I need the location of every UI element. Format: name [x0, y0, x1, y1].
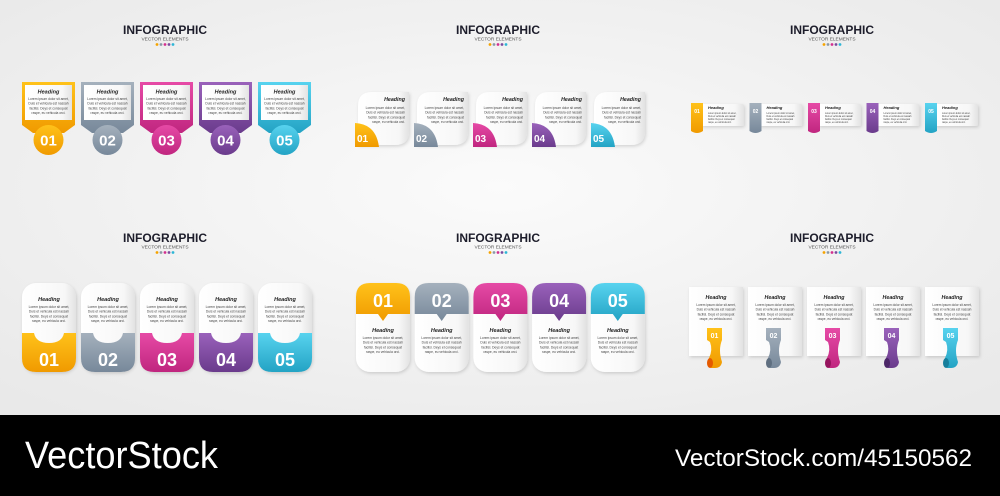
panel: small tab cards (top-right): Heading: [825, 105, 841, 110]
panel: capsule cards with top numbers (bottom-middle): Heading: [548, 328, 571, 334]
panel: small tab cards (top-right): facilisi. Deys et consequat: [884, 118, 910, 121]
panel: small tab cards (top-right): raspe, eu vehicula orci.: [825, 121, 849, 124]
panel: capsule cards with bottom numbers (bottom-left): raspe, eu vehicula orci.: [32, 319, 66, 323]
panel: paper cards with ribbons (bottom-right): Lorem ipsum dolor sit amet,: [696, 303, 736, 307]
title: top-right: VECTOR ELEMENTS: [808, 36, 856, 42]
panel: capsule cards with top numbers (bottom-middle): facilisi. Deys et consequat: [540, 345, 578, 349]
panel: small tab cards (top-right): raspe, eu vehicula orci.: [942, 121, 966, 124]
panel: capsule cards with bottom numbers (bottom-left): facilisi. Deys et consequat: [30, 314, 68, 318]
panel: capsule cards with bottom numbers (bottom-left): raspe, eu vehicula orci.: [150, 319, 184, 323]
panel: capsule cards with top numbers (bottom-middle): facilisi. Deys et consequat: [364, 345, 402, 349]
panel: capsule cards with bottom numbers (bottom-left): 05: [275, 350, 295, 370]
panel: capsule cards with bottom numbers (bottom-left): raspe, eu vehicula orci.: [209, 319, 243, 323]
footer logo text: VectorStock: [25, 435, 219, 477]
panel: small tab cards (top-right): Lorem ipsum dolor sit amet,: [825, 112, 854, 115]
panel: capsule cards with bottom numbers (bottom-left): raspe, eu vehicula orci.: [91, 319, 125, 323]
panel: capsule cards with bottom numbers (bottom-left): Duis et vehicula est nassah: [147, 310, 187, 314]
title: bottom-right: [790, 231, 874, 254]
panel: small tab cards (top-right): Heading: [942, 105, 958, 110]
panel: small tab cards (top-right): 04: [870, 109, 875, 115]
panel: capsule cards with top numbers (bottom-middle): Lorem ipsum dolor sit amet,: [597, 336, 638, 340]
panel: capsule cards with top numbers (bottom-middle): 04: [549, 291, 569, 311]
panel: capsule cards with bottom numbers (bottom-left): Lorem ipsum dolor sit amet,: [265, 305, 305, 309]
panel: capsule cards with bottom numbers (bottom-left): 01: [39, 350, 59, 370]
panel: paper cards with ribbons (bottom-right): Heading: [765, 295, 786, 301]
panel: capsule cards with top numbers (bottom-middle): raspe, eu vehicula orci.: [483, 350, 517, 354]
panel: leaf cards with corner numbers (top-middle): Duis et vehicula est nassah: [602, 111, 641, 115]
panel: framed cards with circles (top-left): raspe, eu vehicula orci.: [268, 111, 302, 115]
panel: small tab cards (top-right): raspe, eu vehicula orci.: [766, 121, 790, 124]
panel: capsule cards with top numbers (bottom-middle): Heading: [431, 328, 453, 334]
panel: capsule cards with top numbers (bottom-middle): Duis et vehicula est nassah: [363, 341, 403, 345]
panel: small tab cards (top-right): Lorem ipsum dolor sit amet,: [942, 112, 971, 115]
panel: framed cards with circles (top-left): Heading: [156, 90, 178, 96]
panel: framed cards with circles (top-left): Duis et vehicula est nassah: [205, 102, 246, 106]
panel: capsule cards with top numbers (bottom-middle): raspe, eu vehicula orci.: [601, 350, 635, 354]
panel: small tab cards (top-right): raspe, eu vehicula orci.: [708, 121, 732, 124]
panel: paper cards with ribbons (bottom-right): raspe, eu vehicula orci.: [700, 317, 733, 321]
panel: paper cards with ribbons (bottom-right): Heading: [824, 295, 845, 301]
panel: capsule cards with bottom numbers (bottom-left): facilisi. Deys et consequat: [148, 314, 186, 318]
panel: paper cards with ribbons (bottom-right): Lorem ipsum dolor sit amet,: [814, 303, 854, 307]
panel: framed cards with circles (top-left): Duis et vehicula est nassah: [87, 102, 128, 106]
panel: small tab cards (top-right): facilisi. Deys et consequat: [825, 118, 852, 121]
panel: small tab cards (top-right): Duis et vehicula est nassah: [825, 115, 854, 118]
panel: framed cards with circles (top-left): Heading: [38, 90, 60, 96]
panel: capsule cards with top numbers (bottom-middle): 03: [490, 291, 510, 311]
panel: framed cards with circles (top-left): facilisi. Deys et consequat: [29, 106, 68, 110]
title: bottom-left: VECTOR ELEMENTS: [141, 244, 189, 250]
panel: capsule cards with top numbers (bottom-middle): Heading: [490, 328, 512, 334]
panel: capsule cards with top numbers (bottom-middle): raspe, eu vehicula orci.: [425, 350, 459, 354]
panel: leaf cards with corner numbers (top-middle): Heading: [502, 97, 524, 103]
panel: framed cards with circles (top-left): facilisi. Deys et consequat: [147, 106, 186, 110]
panel: capsule cards with top numbers (bottom-middle): Duis et vehicula est nassah: [598, 341, 638, 345]
panel: leaf cards with corner numbers (top-middle): 02: [416, 134, 428, 145]
panel: small tab cards (top-right): 02: [753, 109, 758, 115]
panel: paper cards with ribbons (bottom-right): 05: [947, 333, 954, 340]
panel: framed cards with circles (top-left): facilisi. Deys et consequat: [88, 106, 127, 110]
panel: capsule cards with bottom numbers (bottom-left): Duis et vehicula est nassah: [29, 310, 69, 314]
panel: capsule cards with top numbers (bottom-middle): facilisi. Deys et consequat: [423, 345, 461, 349]
panel: framed cards with circles (top-left): Heading: [274, 90, 296, 96]
panel: leaf cards with corner numbers (top-middle): Lorem ipsum dolor sit amet,: [425, 106, 464, 110]
panel: capsule cards with top numbers (bottom-middle): 05: [608, 291, 628, 311]
panel: small tab cards (top-right): Heading: [884, 105, 900, 110]
panel: capsule cards with bottom numbers (bottom-left): Duis et vehicula est nassah: [88, 310, 128, 314]
panel: capsule cards with top numbers (bottom-middle): facilisi. Deys et consequat: [599, 345, 637, 349]
panel: framed cards with circles (top-left): Duis et vehicula est nassah: [28, 102, 69, 106]
panel: capsule cards with bottom numbers (bottom-left): facilisi. Deys et consequat: [207, 314, 245, 318]
panel: small tab cards (top-right): 03: [811, 109, 817, 115]
panel: paper cards with ribbons (bottom-right): raspe, eu vehicula orci.: [759, 317, 792, 321]
panel: paper cards with ribbons (bottom-right): facilisi. Deys et consequat: [875, 312, 912, 316]
panel: small tab cards (top-right): facilisi. Deys et consequat: [708, 118, 735, 121]
panel: capsule cards with bottom numbers (bottom-left): Heading: [215, 297, 237, 303]
panel: capsule cards with bottom numbers (bottom-left): Duis et vehicula est nassah: [206, 310, 246, 314]
panel: capsule cards with bottom numbers (bottom-left): Heading: [274, 297, 296, 303]
panel: small tab cards (top-right): Heading: [766, 105, 783, 110]
footer url text: VectorStock.com/45150562: [675, 445, 972, 472]
panel: framed cards with circles (top-left): facilisi. Deys et consequat: [206, 106, 245, 110]
title: top-right: [790, 23, 874, 46]
panel: leaf cards with corner numbers (top-middle): Lorem ipsum dolor sit amet,: [602, 106, 641, 110]
panel: capsule cards with bottom numbers (bottom-left): Heading: [38, 297, 60, 303]
footer bar: [0, 415, 1000, 496]
panel: leaf cards with corner numbers (top-middle): facilisi. Deys et consequat: [486, 115, 523, 119]
panel: small tab cards (top-right): Lorem ipsum dolor sit amet,: [708, 112, 737, 115]
panel: small tab cards (top-right): Duis et vehicula est nassah: [766, 115, 795, 118]
panel: paper cards with ribbons (bottom-right): [689, 287, 979, 368]
panel: framed cards with circles (top-left): 01: [40, 132, 57, 150]
panel: paper cards with ribbons (bottom-right): Duis et vehicula est nassah: [874, 308, 913, 312]
panel: framed cards with circles (top-left): Duis et vehicula est nassah: [264, 102, 305, 106]
panel: leaf cards with corner numbers (top-middle): Duis et vehicula est nassah: [543, 111, 582, 115]
panel: leaf cards with corner numbers (top-middle): facilisi. Deys et consequat: [427, 115, 464, 119]
panel: paper cards with ribbons (bottom-right): Lorem ipsum dolor sit amet,: [755, 303, 795, 307]
panel: paper cards with ribbons (bottom-right): Duis et vehicula est nassah: [697, 308, 736, 312]
panel: capsule cards with top numbers (bottom-middle): 01: [373, 291, 393, 311]
panel: framed cards with circles (top-left): raspe, eu vehicula orci.: [91, 111, 125, 115]
panel: capsule cards with top numbers (bottom-middle): Duis et vehicula est nassah: [480, 341, 521, 345]
panel: capsule cards with bottom numbers (bottom-left): facilisi. Deys et consequat: [89, 314, 127, 318]
panel: capsule cards with bottom numbers (bottom-left): facilisi. Deys et consequat: [266, 314, 304, 318]
title: top-middle: VECTOR ELEMENTS: [474, 36, 522, 42]
panel: leaf cards with corner numbers (top-middle): Heading: [620, 97, 642, 103]
panel: paper cards with ribbons (bottom-right): Lorem ipsum dolor sit amet,: [873, 303, 913, 307]
panel: capsule cards with bottom numbers (bottom-left): Lorem ipsum dolor sit amet,: [206, 305, 246, 309]
panel: framed cards with circles (top-left): Heading: [97, 90, 119, 96]
panel: paper cards with ribbons (bottom-right): Duis et vehicula est nassah: [933, 308, 972, 312]
title: bottom-middle: INFOGRAPHIC: [456, 231, 540, 245]
panel: leaf cards with corner numbers (top-middle): Duis et vehicula est nassah: [484, 111, 523, 115]
panel: framed cards with circles (top-left): Lorem ipsum dolor sit amet,: [264, 97, 305, 101]
panel: leaf cards with corner numbers (top-middle): raspe, eu vehicula orci.: [490, 120, 523, 124]
title: top-left: INFOGRAPHIC: [123, 23, 207, 37]
panel: capsule cards with top numbers (bottom-middle): Lorem ipsum dolor sit amet,: [421, 336, 462, 340]
panel: paper cards with ribbons (bottom-right): Heading: [706, 295, 727, 301]
panel: capsule cards with top numbers (bottom-middle): raspe, eu vehicula orci.: [366, 350, 400, 354]
panel: framed cards with circles (top-left): [22, 82, 311, 155]
title: bottom-middle: [456, 231, 540, 254]
panel: leaf cards with corner numbers (top-middle): raspe, eu vehicula orci.: [431, 120, 464, 124]
panel: small tab cards (top-right): Duis et vehicula est nassah: [884, 115, 912, 118]
panel: paper cards with ribbons (bottom-right): raspe, eu vehicula orci.: [877, 317, 910, 321]
title: bottom-middle: VECTOR ELEMENTS: [474, 244, 522, 250]
panel: paper cards with ribbons (bottom-right): raspe, eu vehicula orci.: [818, 317, 851, 321]
panel: capsule cards with bottom numbers (bottom-left): Lorem ipsum dolor sit amet,: [29, 305, 69, 309]
panel: capsule cards with bottom numbers (bottom-left): Heading: [156, 297, 178, 303]
panel: capsule cards with top numbers (bottom-middle): Duis et vehicula est nassah: [539, 341, 579, 345]
panel: leaf cards with corner numbers (top-middle): facilisi. Deys et consequat: [545, 115, 582, 119]
panel: leaf cards with corner numbers (top-middle): 04: [534, 134, 546, 145]
panel: framed cards with circles (top-left): raspe, eu vehicula orci.: [32, 111, 66, 115]
panel: capsule cards with top numbers (bottom-middle): Heading: [372, 328, 394, 334]
panel: leaf cards with corner numbers (top-middle): Heading: [384, 97, 406, 103]
panel: framed cards with circles (top-left): Duis et vehicula est nassah: [146, 102, 187, 106]
panel: capsule cards with bottom numbers (bottom-left): [22, 283, 312, 372]
panel: leaf cards with corner numbers (top-middle): 05: [593, 134, 605, 145]
panel: capsule cards with bottom numbers (bottom-left): 04: [216, 350, 236, 370]
panel: small tab cards (top-right): Lorem ipsum dolor sit amet,: [884, 112, 912, 115]
panel: capsule cards with bottom numbers (bottom-left): 03: [157, 350, 177, 370]
panel: framed cards with circles (top-left): Lorem ipsum dolor sit amet,: [87, 97, 128, 101]
panel: paper cards with ribbons (bottom-right): Heading: [942, 295, 963, 301]
panel: small tab cards (top-right): 01: [694, 109, 700, 115]
panel: leaf cards with corner numbers (top-middle): 01: [357, 134, 369, 145]
panel: capsule cards with top numbers (bottom-middle): raspe, eu vehicula orci.: [542, 350, 576, 354]
panel: paper cards with ribbons (bottom-right): Duis et vehicula est nassah: [815, 308, 854, 312]
panel: framed cards with circles (top-left): raspe, eu vehicula orci.: [209, 111, 243, 115]
panel: small tab cards (top-right): Heading: [708, 105, 724, 110]
panel: paper cards with ribbons (bottom-right): 01: [711, 333, 718, 340]
panel: small tab cards (top-right): Duis et vehicula est nassah: [942, 115, 971, 118]
panel: framed cards with circles (top-left): Lorem ipsum dolor sit amet,: [205, 97, 246, 101]
panel: leaf cards with corner numbers (top-middle): Duis et vehicula est nassah: [425, 111, 464, 115]
panel: framed cards with circles (top-left): Heading: [215, 90, 237, 96]
panel: paper cards with ribbons (bottom-right): 03: [829, 333, 836, 340]
panel: capsule cards with top numbers (bottom-middle): 02: [432, 291, 452, 311]
panel: leaf cards with corner numbers (top-middle): Heading: [443, 97, 465, 103]
title: top-middle: [456, 23, 540, 46]
panel: framed cards with circles (top-left): raspe, eu vehicula orci.: [150, 111, 184, 115]
panel: capsule cards with top numbers (bottom-middle): Lorem ipsum dolor sit amet,: [363, 336, 403, 340]
panel: paper cards with ribbons (bottom-right): Duis et vehicula est nassah: [756, 308, 795, 312]
panel: paper cards with ribbons (bottom-right): 02: [770, 333, 777, 340]
panel: leaf cards with corner numbers (top-middle): facilisi. Deys et consequat: [604, 115, 641, 119]
panel: paper cards with ribbons (bottom-right): Heading: [883, 295, 904, 301]
panel: framed cards with circles (top-left): 02: [99, 132, 116, 150]
panel: paper cards with ribbons (bottom-right): facilisi. Deys et consequat: [698, 312, 735, 316]
panel: small tab cards (top-right): Lorem ipsum dolor sit amet,: [766, 112, 795, 115]
panel: paper cards with ribbons (bottom-right): Lorem ipsum dolor sit amet,: [932, 303, 972, 307]
panel: framed cards with circles (top-left): Lorem ipsum dolor sit amet,: [28, 97, 69, 101]
panel: capsule cards with bottom numbers (bottom-left): Lorem ipsum dolor sit amet,: [88, 305, 128, 309]
panel: capsule cards with bottom numbers (bottom-left): Lorem ipsum dolor sit amet,: [147, 305, 187, 309]
panel: capsule cards with bottom numbers (bottom-left): 02: [98, 350, 118, 370]
panel: capsule cards with bottom numbers (bottom-left): Heading: [97, 297, 119, 303]
title: bottom-left: [123, 231, 207, 254]
title: bottom-right: VECTOR ELEMENTS: [808, 244, 856, 250]
panel: capsule cards with bottom numbers (bottom-left): raspe, eu vehicula orci.: [268, 319, 302, 323]
panel: capsule cards with top numbers (bottom-middle): Lorem ipsum dolor sit amet,: [480, 336, 521, 340]
panel: paper cards with ribbons (bottom-right): facilisi. Deys et consequat: [816, 312, 853, 316]
panel: small tab cards (top-right): 05: [928, 109, 934, 115]
panel: paper cards with ribbons (bottom-right): raspe, eu vehicula orci.: [936, 317, 969, 321]
panel: leaf cards with corner numbers (top-middle): raspe, eu vehicula orci.: [549, 120, 582, 124]
panel: leaf cards with corner numbers (top-middle): Lorem ipsum dolor sit amet,: [484, 106, 523, 110]
panel: leaf cards with corner numbers (top-middle): 03: [475, 134, 487, 145]
panel: leaf cards with corner numbers (top-middle): raspe, eu vehicula orci.: [372, 120, 405, 124]
panel: framed cards with circles (top-left): 04: [217, 132, 234, 150]
panel: paper cards with ribbons (bottom-right): facilisi. Deys et consequat: [757, 312, 794, 316]
panel: framed cards with circles (top-left): facilisi. Deys et consequat: [265, 106, 304, 110]
panel: capsule cards with top numbers (bottom-middle): Lorem ipsum dolor sit amet,: [539, 336, 580, 340]
title: top-right: INFOGRAPHIC: [790, 23, 874, 37]
title: top-middle: INFOGRAPHIC: [456, 23, 540, 37]
panel: paper cards with ribbons (bottom-right): 04: [888, 333, 895, 340]
panel: capsule cards with bottom numbers (bottom-left): Duis et vehicula est nassah: [265, 310, 305, 314]
panel: leaf cards with corner numbers (top-middle): Lorem ipsum dolor sit amet,: [543, 106, 582, 110]
panel: small tab cards (top-right): Duis et vehicula est nassah: [708, 115, 737, 118]
title: top-left: VECTOR ELEMENTS: [141, 36, 189, 42]
title: top-left: [123, 23, 207, 46]
panel: small tab cards (top-right): facilisi. Deys et consequat: [942, 118, 969, 121]
panel: capsule cards with top numbers (bottom-middle): facilisi. Deys et consequat: [481, 345, 520, 349]
panel: capsule cards with top numbers (bottom-middle): Duis et vehicula est nassah: [422, 341, 462, 345]
panel: framed cards with circles (top-left): Lorem ipsum dolor sit amet,: [146, 97, 187, 101]
panel: capsule cards with top numbers (bottom-middle): Heading: [607, 328, 629, 334]
panel: leaf cards with corner numbers (top-middle): facilisi. Deys et consequat: [368, 115, 405, 119]
panel: small tab cards (top-right): facilisi. Deys et consequat: [766, 118, 793, 121]
panel: leaf cards with corner numbers (top-middle): Lorem ipsum dolor sit amet,: [366, 106, 405, 110]
panel: leaf cards with corner numbers (top-middle): Duis et vehicula est nassah: [366, 111, 405, 115]
panel: capsule cards with top numbers (bottom-middle): [356, 283, 645, 372]
title: bottom-right: INFOGRAPHIC: [790, 231, 874, 245]
panel: small tab cards (top-right): raspe, eu vehicula orci.: [884, 121, 907, 124]
panel: leaf cards with corner numbers (top-middle): [355, 92, 645, 147]
panel: leaf cards with corner numbers (top-middle): Heading: [561, 97, 583, 103]
title: bottom-left: INFOGRAPHIC: [123, 231, 207, 245]
panel: leaf cards with corner numbers (top-middle): raspe, eu vehicula orci.: [608, 120, 641, 124]
panel: framed cards with circles (top-left): 05: [276, 132, 293, 150]
panel: small tab cards (top-right): [691, 103, 978, 133]
panel: framed cards with circles (top-left): 03: [158, 132, 175, 150]
panel: paper cards with ribbons (bottom-right): facilisi. Deys et consequat: [934, 312, 971, 316]
